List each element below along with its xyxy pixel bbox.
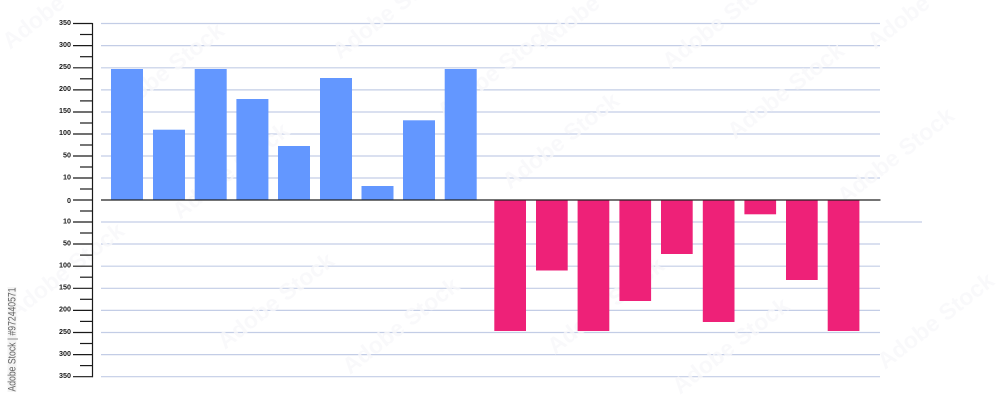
watermarks: Adobe Stock — [212, 247, 339, 354]
watermarks: Adobe Stock — [167, 117, 294, 224]
axis labels: 250 — [59, 327, 71, 336]
watermarks: Adobe Stock — [102, 17, 229, 124]
axis labels: 150 — [59, 106, 71, 115]
axis labels: 350 — [59, 371, 71, 380]
axis labels: 350 — [59, 18, 71, 27]
axis labels: 300 — [59, 40, 71, 49]
watermarks: Adobe Stock — [432, 17, 559, 124]
watermarks: Adobe Stock — [722, 37, 849, 144]
watermarks: Adobe Stock — [667, 292, 794, 399]
axis labels: 100 — [59, 260, 71, 270]
vertical axis with ticks — [73, 23, 92, 377]
axis labels: 10 — [63, 216, 71, 225]
axis labels: 200 — [59, 305, 71, 314]
positive blue bars — [111, 69, 477, 200]
watermarks: Adobe Stock — [337, 272, 464, 379]
grid lines — [101, 24, 922, 377]
watermarks: Adobe Stock — [542, 252, 669, 359]
axis labels: 50 — [63, 238, 71, 247]
watermarks: Adobe Stock — [872, 267, 999, 374]
axis labels: 300 — [59, 349, 71, 358]
axis labels: 0 — [67, 196, 71, 205]
watermarks: Adobe Stock — [2, 217, 129, 324]
watermarks: Adobe Stock — [497, 87, 624, 194]
axis labels: 150 — [59, 283, 71, 292]
stock id caption: Adobe Stock | #972440571 — [6, 288, 18, 392]
axis labels: 10 — [63, 172, 71, 181]
zero baseline — [101, 199, 880, 201]
axis labels: 200 — [59, 84, 71, 93]
axis labels: 250 — [59, 62, 71, 71]
axis labels: 50 — [63, 150, 71, 159]
axis labels — [59, 18, 71, 380]
negative pink bars — [494, 200, 859, 331]
watermarks: Adobe Stock — [832, 102, 959, 209]
axis labels: 100 — [59, 128, 71, 137]
